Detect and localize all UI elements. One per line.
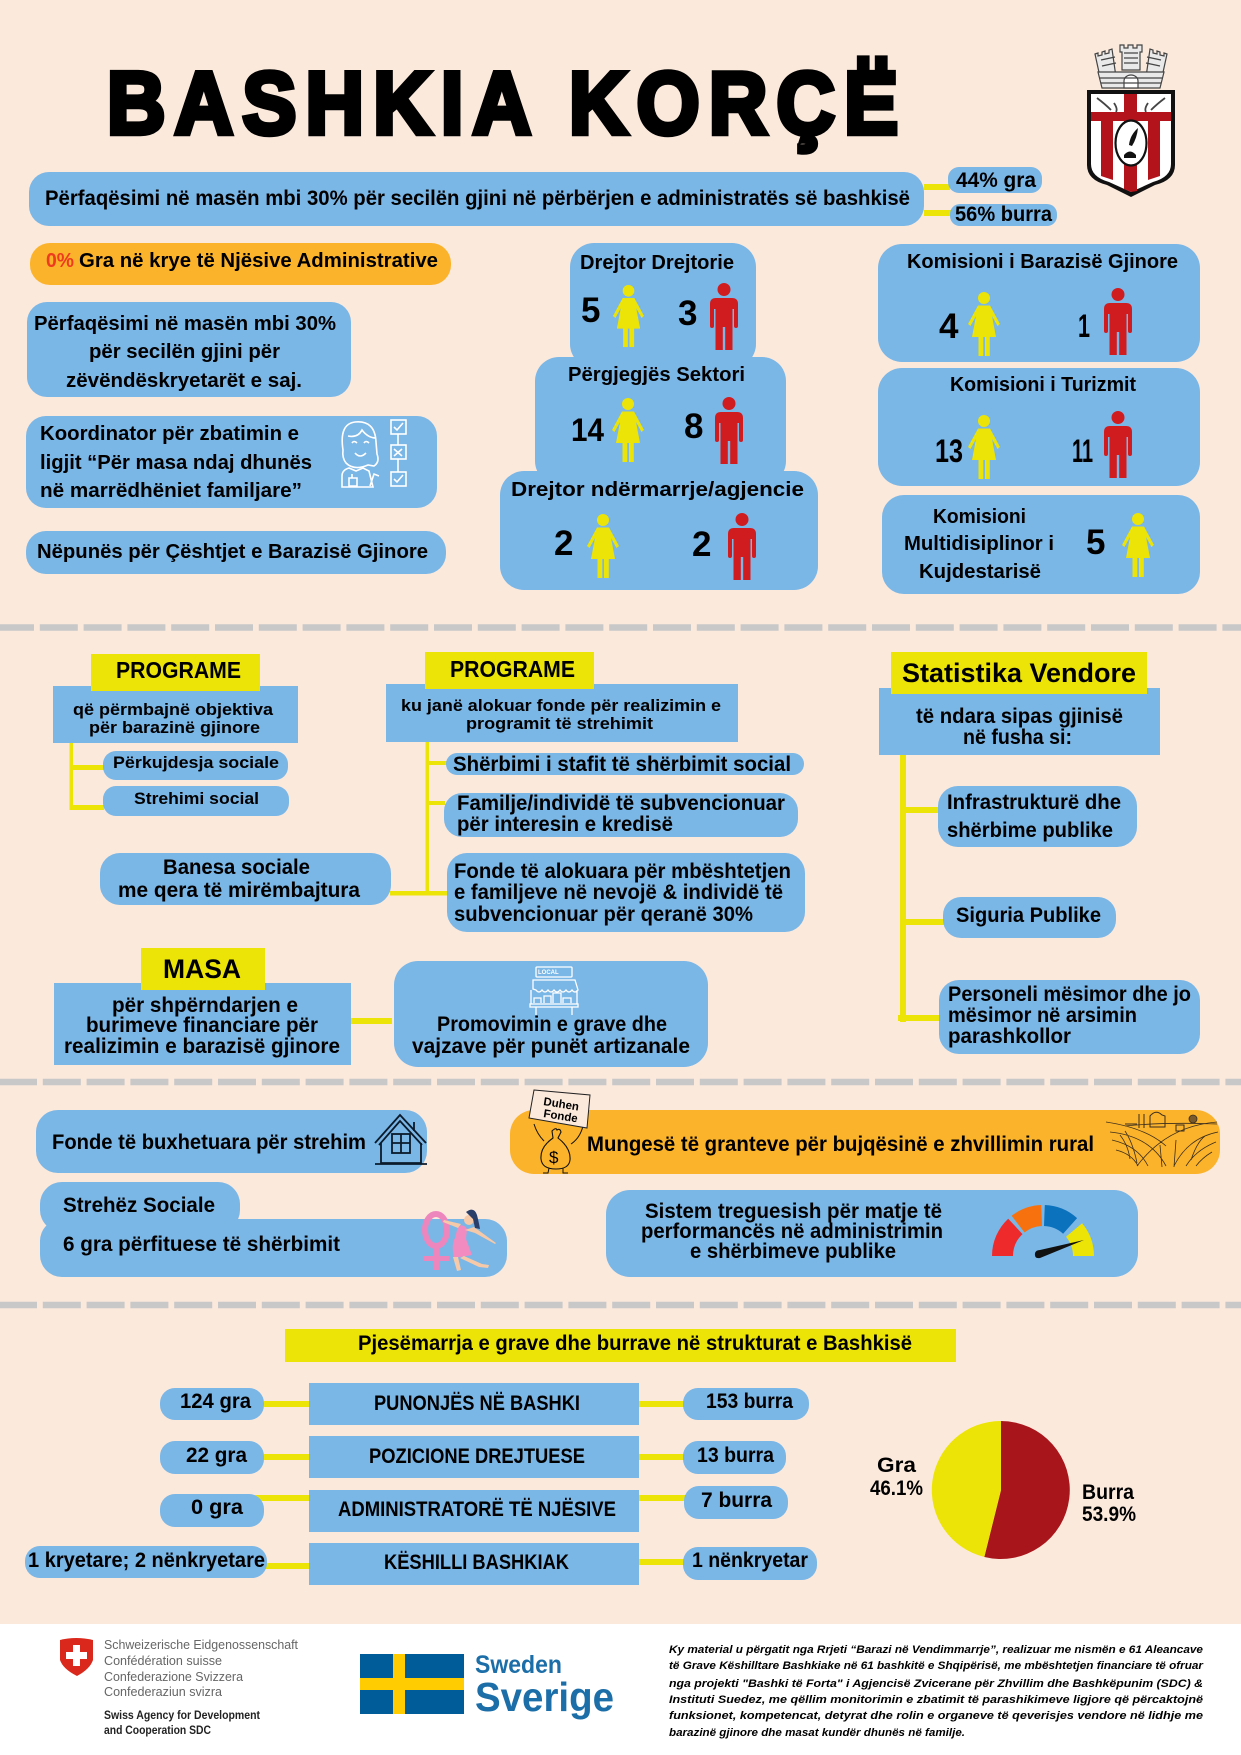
row: municipal employees — [160, 1383, 809, 1425]
connector: measures to promotion — [351, 1018, 392, 1024]
icon: local market stall — [530, 967, 578, 1015]
icon: woman figure — [612, 398, 644, 462]
panel: promoting artisan women: Promovimin e grave dhe — [437, 1013, 667, 1036]
panel: budgeted shelter funds — [36, 1110, 427, 1173]
heading tag: PROGRAME: PROGRAME — [116, 657, 241, 683]
heading tag: PROGRAME — [91, 654, 260, 691]
row: leading positions: POZICIONE DREJTUESE — [369, 1445, 585, 1468]
pill: allocated support funds: Fonde të alokuara për mbështetjen — [454, 860, 791, 883]
pill: subsidised families: për interesin e kredisë — [457, 813, 673, 836]
icon: man figure — [1104, 411, 1132, 478]
logo: Swiss confederation: Swiss Agency for Development — [104, 1710, 260, 1722]
text: acknowledgement note: funksionet, kompetencat, detyrat dhe rolin e organeve të qeverisjes vendore në lidhje me — [669, 1710, 1203, 1722]
icon: woman figure — [613, 285, 644, 347]
panel: performance indicators system: Sistem treguesish për matje të — [645, 1200, 942, 1223]
label: women share: 46.1% — [870, 1477, 923, 1500]
text: acknowledgement note: Ky material u përgatit nga Rrjeti “Barazi në Vendimmarrje”, realizuar me nismën e 61 Aleancave — [669, 1644, 1203, 1656]
footer — [0, 1624, 1241, 1755]
icon: woman figure — [1122, 513, 1154, 577]
row: unit administrators: ADMINISTRATORË TË NJËSIVE — [338, 1498, 616, 1521]
panel: local statistics: në fusha si: — [963, 726, 1072, 749]
panel: enterprise and agency directors: 2 — [692, 525, 711, 564]
panel: multidisciplinary care commission: 5 — [1086, 523, 1105, 562]
icon: woman with female symbol — [423, 1210, 496, 1271]
panel: performance indicators system: e shërbimeve publike — [690, 1240, 896, 1263]
pill: allocated support funds: e familjeve në nevojë & individë të — [454, 881, 783, 904]
panel: promoting artisan women — [394, 961, 708, 1067]
panel: deputy mayors representation: për secilën gjini për — [89, 340, 280, 363]
row: municipal employees: 153 burra — [706, 1390, 793, 1413]
logo: Swiss confederation: Schweizerische Eidgenossenschaft — [104, 1638, 299, 1652]
panel: performance indicators system: performancës në administrimin — [641, 1220, 943, 1243]
panel: social shelter: 6 gra përfituese të shërbimit — [63, 1233, 340, 1256]
logo: Swiss confederation — [60, 1638, 299, 1737]
logo: Swiss confederation: Confederazione Svizzera — [104, 1670, 243, 1684]
heading tag: MASA — [141, 948, 265, 990]
panel: gender equality commission — [878, 244, 1200, 362]
icon: man figure — [710, 283, 738, 350]
row: municipal employees: PUNONJËS NË BASHKI — [374, 1392, 580, 1415]
panel: sector heads: Përgjegjës Sektori — [568, 363, 745, 386]
panel: measures: burimeve financiare për — [86, 1014, 318, 1037]
panel: coordinator for the domestic violence law: Koordinator për zbatimin e — [40, 422, 299, 445]
pill: social housing — [103, 786, 289, 816]
panel: programmes with allocated funds — [386, 652, 805, 932]
icon: man figure — [1104, 288, 1132, 355]
panel: 0% women heading administrative units: Gra në krye të Njësive Administrative — [79, 249, 438, 272]
icon: Korçë coat of arms — [1087, 45, 1175, 197]
panel: enterprise and agency directors: 2 — [554, 524, 573, 563]
panel: 0% women heading administrative units — [30, 243, 451, 285]
icon: figure with sign — [529, 1090, 590, 1173]
label: women share — [870, 1454, 923, 1500]
panel: measures — [54, 948, 351, 1065]
panel: programmes with allocated funds: programit të strehimit — [466, 714, 653, 733]
label: men share: 53.9% — [1082, 1503, 1136, 1526]
pill: infrastructure and public services: shërbime publike — [947, 819, 1113, 842]
row: municipal council: 1 kryetare; 2 nënkryetare — [28, 1549, 265, 1572]
panel: coordinator for the domestic violence law — [26, 416, 437, 508]
heading: participation of women and men: Pjesëmarrja e grave dhe burrave në strukturat e Bashkisë — [358, 1332, 912, 1355]
row: leading positions — [160, 1436, 786, 1478]
pill: preschool staff: mësimor në arsimin — [948, 1004, 1137, 1027]
heading tag: Statistika Vendore: Statistika Vendore — [902, 658, 1136, 688]
row: leading positions: 22 gra — [186, 1444, 247, 1467]
panel: social shelter — [40, 1182, 507, 1277]
panel: sector heads: 14 — [571, 412, 604, 448]
label: men share: Burra — [1082, 1481, 1134, 1504]
panel: gender equality officer: Nëpunës për Çështjet e Barazisë Gjinore — [37, 540, 428, 563]
text: acknowledgement note: të Grave Këshilltare Bashkiake në 61 bashkitë e Shqipërisë, me mbështetjen financiare të ofruar — [669, 1660, 1204, 1672]
icon: woman figure — [968, 415, 1000, 479]
row: unit administrators: 7 burra — [701, 1489, 772, 1512]
label: women share: Gra — [877, 1454, 916, 1477]
row: municipal employees: 124 gra — [180, 1390, 251, 1413]
panel: gender equality commission: Komisioni i Barazisë Gjinore — [907, 250, 1178, 273]
pill: preschool staff: parashkollor — [948, 1025, 1071, 1048]
pill: public safety — [943, 897, 1116, 938]
panel: gender equality commission: 1 — [1078, 308, 1090, 344]
panel: promoting artisan women: LOCAL — [538, 970, 559, 976]
panel: directors of directorates: 5 — [581, 291, 600, 330]
panel: sector heads: 8 — [684, 407, 703, 446]
icon: woman with checklist — [342, 420, 406, 487]
panel: programmes with gender objectives: që përmbajnë objektiva — [73, 700, 274, 719]
panel: administration representation: Përfaqësimi në masën mbi 30% për secilën gjini në përbërjen e administratës së bashkisë — [45, 187, 910, 210]
panel: multidisciplinary care commission — [882, 495, 1200, 594]
pill: social service staff: Shërbimi i stafit të shërbimit social — [453, 753, 791, 776]
panel: local statistics — [879, 652, 1200, 1054]
panel: tourism commission — [878, 368, 1200, 486]
panel: social rental housing: me qera të mirëmbajtura — [118, 879, 360, 902]
icon: woman figure — [968, 292, 1000, 356]
panel: measures: realizimin e barazisë gjinore — [64, 1035, 340, 1058]
chart: pie of women and men — [870, 1421, 1136, 1559]
callout: 44% women: 44% gra — [956, 169, 1036, 192]
panel: tourism commission: Komisioni i Turizmit — [950, 373, 1136, 396]
panel: gender equality commission: 4 — [939, 307, 959, 346]
panel: deputy mayors representation — [27, 302, 351, 397]
heading: participation of women and men — [285, 1329, 956, 1362]
row: municipal council: KËSHILLI BASHKIAK — [384, 1551, 569, 1574]
panel: lack of agriculture grants: Mungesë të granteve për bujqësinë e zhvillimin rural — [587, 1133, 1094, 1156]
panel: multidisciplinary care commission: Multidisiplinor i — [904, 532, 1054, 555]
heading tag: PROGRAME — [425, 652, 594, 689]
panel: coordinator for the domestic violence law: në marrëdhëniet familjare” — [40, 479, 302, 502]
text: acknowledgement note: nga projekti "Bashki të Forta" i Agjencisë Zvicerane për Zhvillim dhe Bashkëpunim (SDC) & — [669, 1678, 1203, 1690]
panel: directors of directorates: 3 — [678, 294, 697, 333]
panel: promoting artisan women: vajzave për punët artizanale — [412, 1035, 690, 1058]
pill: subsidised families — [444, 792, 798, 837]
panel: directors of directorates — [570, 243, 756, 368]
pill: preschool staff — [939, 980, 1200, 1054]
pill: social care: Përkujdesja sociale — [113, 753, 279, 772]
icon: woman figure — [587, 514, 619, 578]
panel: multidisciplinary care commission: Kujdestarisë — [919, 560, 1041, 583]
row: municipal council — [25, 1543, 817, 1585]
panel: budgeted shelter funds: Fonde të buxhetuara për strehim — [52, 1131, 366, 1154]
title: BASHKIA KORÇË — [107, 53, 898, 152]
panel: gender equality officer — [26, 531, 446, 574]
pill: public safety: Siguria Publike — [956, 904, 1101, 927]
callout: 56% men: 56% burra — [955, 203, 1052, 226]
crest: castle crown — [1095, 45, 1167, 88]
panel: enterprise and agency directors — [500, 471, 818, 590]
text: acknowledgement note: barazinë gjinore dhe masat kundër dhunës në familje. — [669, 1727, 965, 1739]
panel: tourism commission: 11 — [1072, 433, 1093, 469]
heading tag: PROGRAME: PROGRAME — [450, 656, 575, 682]
pill: social housing: Strehimi social — [134, 789, 259, 808]
crest: shield — [1087, 90, 1175, 197]
pill: infrastructure and public services: Infrastrukturë dhe — [947, 791, 1121, 814]
panel: enterprise and agency directors: Drejtor ndërmarrje/agjencie — [511, 478, 804, 501]
logo: Swiss confederation: Confédération suisse — [104, 1654, 222, 1668]
row: leading positions: 13 burra — [697, 1444, 774, 1467]
row: municipal council: 1 nënkryetar — [692, 1549, 808, 1572]
panel: programmes with allocated funds: ku janë alokuar fonde për realizimin e — [401, 696, 721, 715]
icon: figure with sign: Fonde — [543, 1108, 578, 1125]
panel: local statistics: të ndara sipas gjinisë — [916, 705, 1123, 728]
logo: Swiss confederation: Confederaziun svizra — [104, 1685, 222, 1699]
panel: measures: për shpërndarjen e — [112, 994, 298, 1017]
logo: Swiss confederation: and Cooperation SDC — [104, 1725, 211, 1737]
logo: Sweden Sverige — [360, 1651, 614, 1720]
pill: infrastructure and public services — [938, 786, 1137, 847]
panel: directors of directorates: Drejtor Drejtorie — [580, 251, 734, 274]
pill: subsidised families: Familje/individë të subvencionuar — [457, 792, 785, 815]
icon: figure with sign: $ — [549, 1148, 559, 1167]
logo: Sweden Sverige: Sweden — [475, 1651, 562, 1679]
icon: house — [375, 1115, 427, 1164]
panel: sector heads — [535, 357, 786, 485]
panel: social shelter: Strehëz Sociale — [63, 1194, 215, 1217]
pill: social care — [103, 751, 288, 780]
panel: social rental housing: Banesa sociale — [163, 856, 310, 879]
icon: man figure — [728, 513, 756, 580]
icon: farm landscape — [1106, 1112, 1218, 1167]
panel: lack of agriculture grants — [510, 1090, 1220, 1174]
icon: gauge — [992, 1205, 1094, 1258]
icon: figure with sign: Duhen — [543, 1096, 580, 1114]
panel: deputy mayors representation: zëvëndëskryetarët e saj. — [66, 369, 302, 392]
logo: Sweden Sverige: Sverige — [475, 1674, 614, 1720]
pill: allocated support funds — [447, 853, 805, 932]
heading tag: MASA: MASA — [163, 954, 241, 984]
label: men share — [1082, 1481, 1136, 1526]
pill: preschool staff: Personeli mësimor dhe jo — [948, 983, 1191, 1006]
heading tag: Statistika Vendore — [891, 652, 1147, 694]
text: acknowledgement note: Instituti Suedez, me qëllim monitorimin e zbatimit të parashikimeve ligjore që përcaktojnë — [669, 1694, 1203, 1706]
panel: performance indicators system — [606, 1190, 1138, 1277]
row: unit administrators — [160, 1486, 788, 1532]
icon: man figure — [715, 397, 743, 464]
pill: allocated support funds: subvencionuar për qeranë 30% — [454, 903, 753, 926]
panel: coordinator for the domestic violence law: ligjit “Për masa ndaj dhunës — [40, 451, 312, 474]
panel: deputy mayors representation: Përfaqësimi në masën mbi 30% — [34, 312, 336, 335]
panel: multidisciplinary care commission: Komisioni — [933, 505, 1026, 528]
panel: 0% women heading administrative units: 0% — [46, 249, 74, 272]
panel: tourism commission: 13 — [935, 433, 963, 469]
panel: programmes with gender objectives — [53, 654, 298, 816]
row: unit administrators: 0 gra — [191, 1496, 243, 1519]
callout: 44% women — [924, 167, 1042, 193]
text: acknowledgement note — [669, 1644, 1204, 1739]
panel: social rental housing — [100, 853, 391, 905]
panel: programmes with gender objectives: për barazinë gjinore — [89, 718, 260, 737]
panel: administration representation — [29, 172, 924, 226]
